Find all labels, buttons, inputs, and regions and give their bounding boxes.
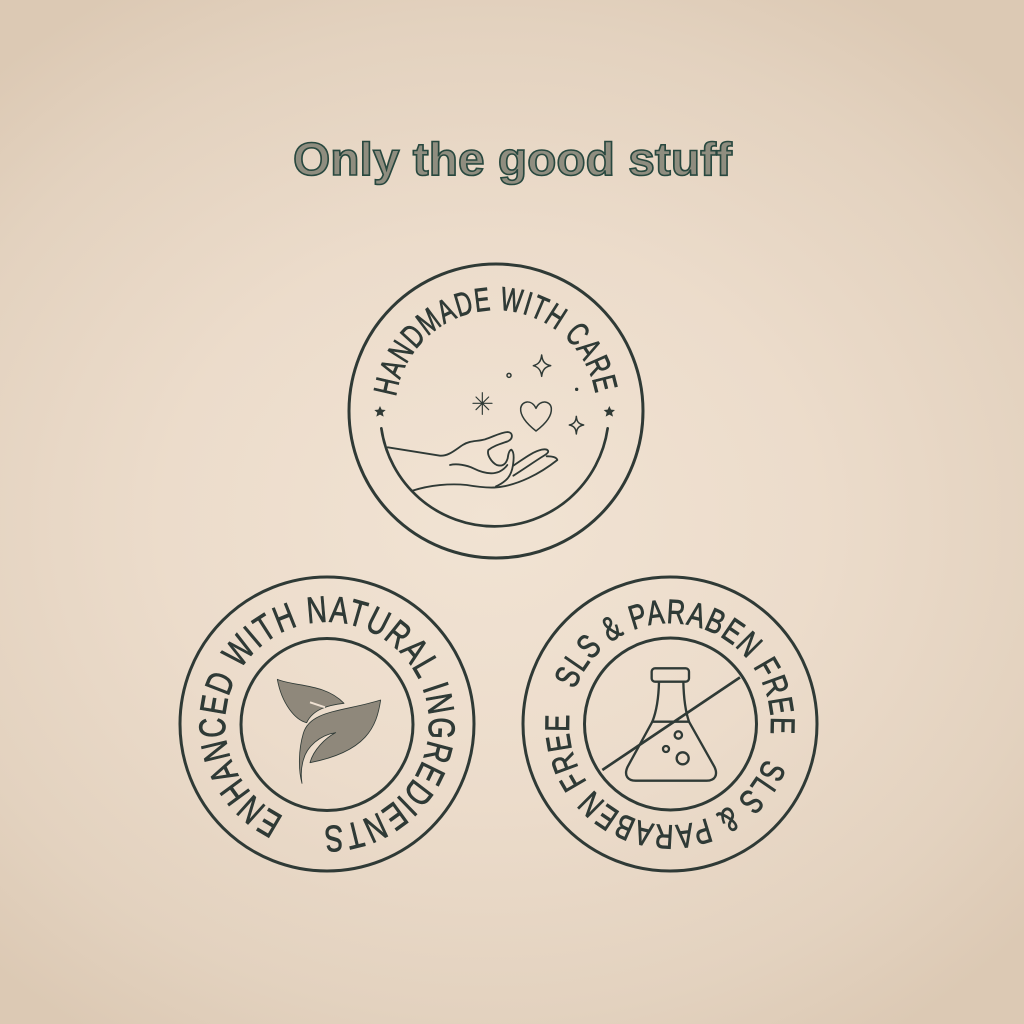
curved label: ENHANCED WITH NATURAL INGREDIENTS xyxy=(198,596,456,852)
outer ring xyxy=(349,264,643,558)
smile arc xyxy=(381,428,608,526)
badge: handmade with care xyxy=(348,262,644,560)
curved label bottom: SLS & PARABEN FREE xyxy=(545,716,784,850)
outer ring xyxy=(523,577,817,871)
back leaf xyxy=(277,679,344,723)
asterisk sparkle xyxy=(473,393,492,414)
icon: leaves xyxy=(277,679,381,783)
front leaf xyxy=(299,700,381,783)
star left xyxy=(374,406,386,417)
flask xyxy=(626,668,716,781)
small sparkle xyxy=(569,416,584,434)
inner ring xyxy=(241,638,413,810)
large sparkle xyxy=(533,355,551,376)
curved label: HANDMADE WITH CARE xyxy=(374,286,618,396)
hand xyxy=(388,432,557,491)
dot xyxy=(575,388,578,391)
title: Only the good stuff xyxy=(293,133,733,185)
slash xyxy=(602,677,740,770)
ring dot xyxy=(507,373,511,377)
inner ring xyxy=(584,638,756,810)
star right xyxy=(604,406,615,417)
icon: crossed out flask xyxy=(602,668,740,781)
heart xyxy=(521,402,551,431)
outer ring xyxy=(180,577,474,871)
curved label top: SLS & PARABEN FREE xyxy=(556,599,795,734)
vein xyxy=(310,702,325,707)
hand illustration and sparkles xyxy=(374,355,615,526)
badge: enhanced with natural ingredients xyxy=(178,576,476,872)
badge: SLS and paraben free xyxy=(522,576,818,872)
